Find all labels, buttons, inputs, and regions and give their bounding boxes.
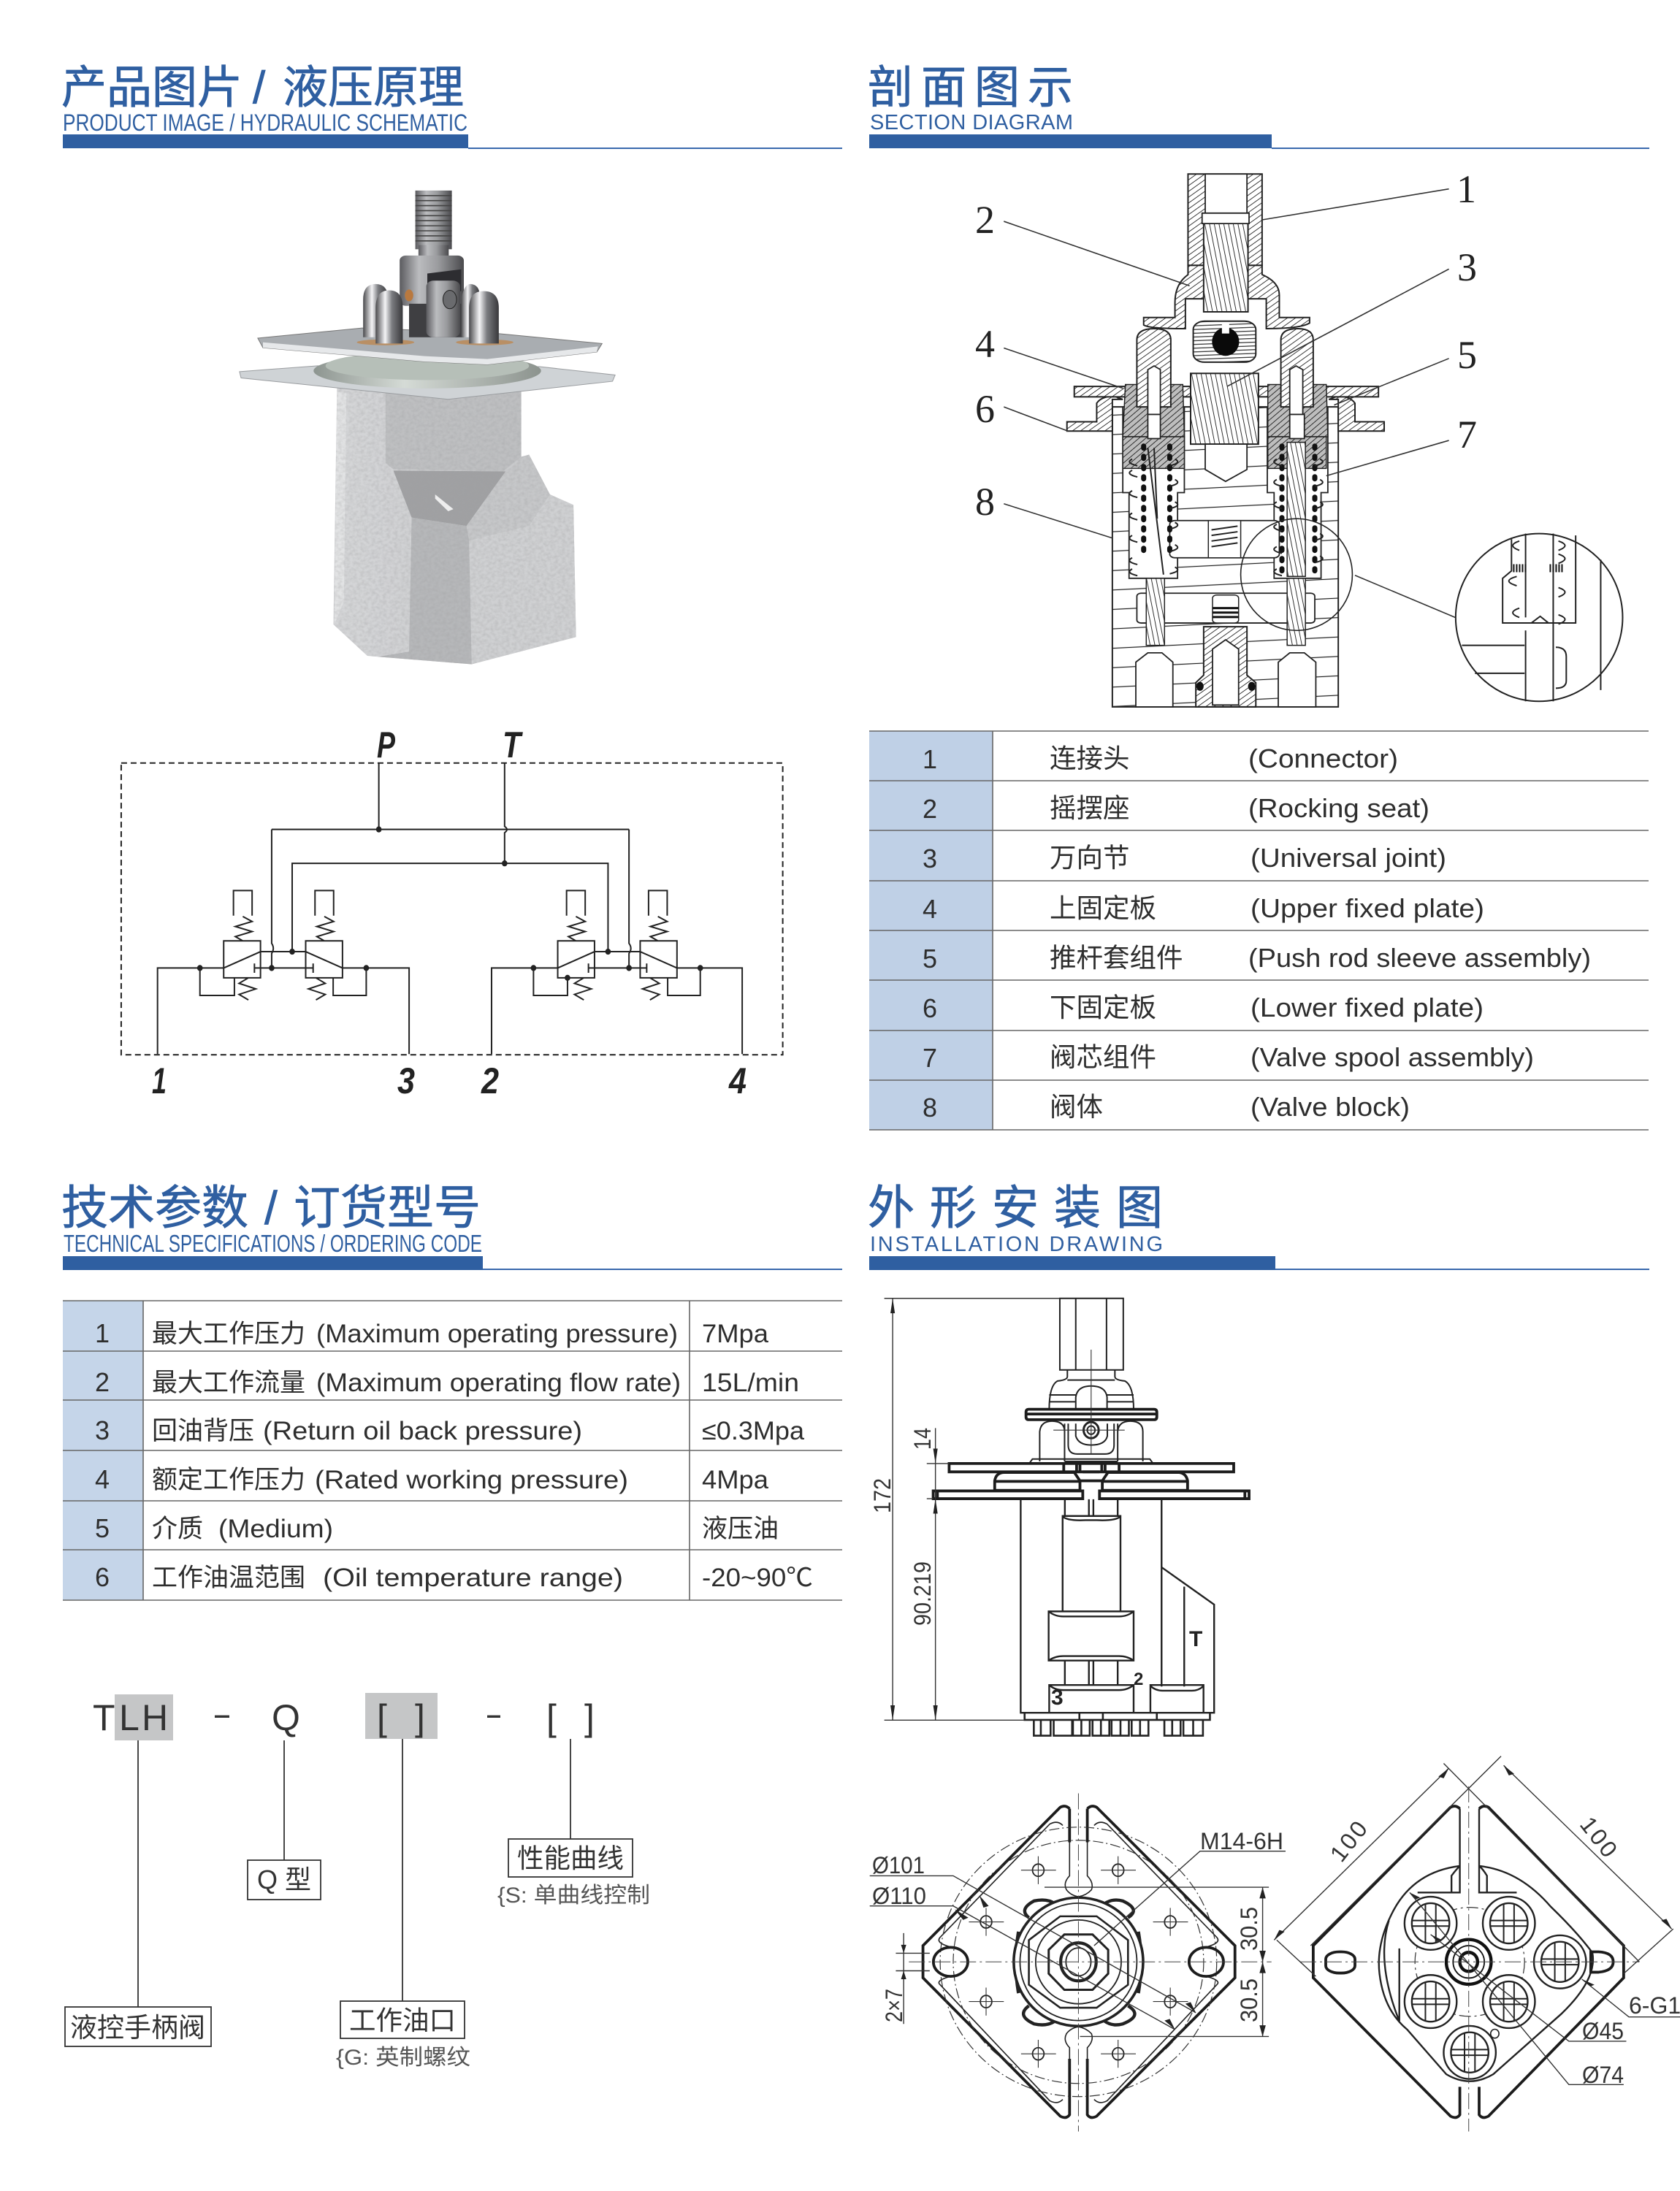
installation dimension labels: Ø110 bbox=[872, 1883, 926, 1909]
parts row 3: 万向节 bbox=[1050, 843, 1129, 873]
section drawing bbox=[1004, 174, 1622, 707]
bottom view: plate outline bbox=[1313, 1806, 1624, 2117]
section: part numbers: 1 bbox=[1456, 167, 1476, 211]
ordering: code letters: Q bbox=[272, 1697, 300, 1738]
parts row 6: 下固定板 bbox=[1050, 993, 1156, 1022]
spec row 3 bbox=[95, 1415, 805, 1445]
spec row 4: 4Mpa bbox=[702, 1466, 769, 1494]
section: leader lines bbox=[1004, 189, 1449, 538]
ordering: label work port bbox=[340, 2001, 465, 2038]
specifications table bbox=[63, 1301, 842, 1600]
photo: valve product bbox=[240, 191, 615, 665]
section: part numbers: 2 bbox=[975, 198, 995, 242]
parts row 5 bbox=[923, 943, 1591, 974]
installation dimension labels: 30.5 bbox=[1236, 1978, 1262, 2022]
top view: centerlines bbox=[909, 1793, 1272, 2132]
bottom view: small dowel bbox=[1491, 2029, 1499, 2038]
ordering: code letters: [ bbox=[546, 1697, 557, 1738]
parts row 8: (Valve block) bbox=[1251, 1092, 1410, 1122]
parts row 4: 上固定板 bbox=[1050, 893, 1156, 923]
heading: product image / hydraulic schematic: PRODUCT IMAGE / HYDRAULIC SCHEMATIC bbox=[63, 110, 467, 136]
ordering: label work port: 工作油口 bbox=[349, 2005, 456, 2035]
bottom view: body contour bbox=[1379, 1809, 1593, 2081]
parts table bbox=[869, 731, 1649, 1130]
section: universal joint bbox=[1194, 321, 1256, 362]
bottom view: port crosses bbox=[1412, 1904, 1578, 2072]
schematic: port labels: 2 bbox=[481, 1060, 499, 1101]
top view: bolt holes bbox=[969, 1857, 1188, 2068]
section: upper fixed plate bbox=[1074, 386, 1378, 397]
bottom view: slots bbox=[1326, 1951, 1614, 1973]
spec row 1 bbox=[95, 1318, 769, 1348]
side view: base and screws bbox=[1025, 1713, 1210, 1736]
spec row 1: (Maximum operating pressure) bbox=[316, 1320, 678, 1348]
spec row 4: 额定工作压力 bbox=[152, 1466, 305, 1494]
ordering: label performance curve: 性能曲线 bbox=[517, 1843, 624, 1873]
parts row 4: 4 bbox=[923, 894, 937, 924]
schematic: port labels: T bbox=[503, 724, 524, 765]
installation dimension labels: M14-6H bbox=[1200, 1828, 1283, 1854]
parts row 7: (Valve spool assembly) bbox=[1251, 1042, 1534, 1072]
side view: flange bbox=[1026, 1410, 1157, 1420]
heading: installation drawing: INSTALLATION DRAWING bbox=[870, 1233, 1163, 1256]
heading: technical specifications / ordering code: 技术参数/订货型号 bbox=[61, 1182, 481, 1234]
parts row 1 bbox=[923, 743, 1398, 774]
photo: threaded stud bbox=[416, 191, 452, 258]
parts row 2: (Rocking seat) bbox=[1248, 793, 1429, 823]
parts row 2: 摇摆座 bbox=[1050, 793, 1129, 823]
ordering: connector lines bbox=[138, 1739, 570, 2007]
top view: mounting slots bbox=[933, 1947, 1223, 1976]
section: part numbers: 8 bbox=[975, 480, 995, 524]
bottom view: ports bbox=[1405, 1897, 1586, 2079]
parts row 5: 5 bbox=[923, 944, 937, 974]
spec row 4: 4 bbox=[95, 1464, 110, 1494]
heading: installation drawing: 外形安装图 bbox=[868, 1182, 1163, 1234]
parts row 6: 6 bbox=[923, 993, 937, 1023]
heading: section diagram: 剖面图示 bbox=[868, 63, 1073, 113]
installation dimension labels: 100 bbox=[1575, 1812, 1622, 1862]
side view: hex connector bbox=[1049, 1299, 1134, 1410]
ordering: label hand valve: 液控手柄阀 bbox=[70, 2013, 205, 2043]
top view: mounting circles bbox=[940, 1827, 1217, 2097]
section: detail enlargement bbox=[1456, 534, 1622, 701]
ordering: code letters: – bbox=[215, 1693, 229, 1734]
parts row 1: (Connector) bbox=[1248, 743, 1398, 773]
bottom view: centerlines bbox=[1300, 1786, 1639, 2132]
parts row 6: (Lower fixed plate) bbox=[1251, 993, 1484, 1022]
installation dimension labels: Ø45 bbox=[1582, 2018, 1624, 2044]
side view: rods and joint bbox=[1030, 1421, 1153, 1463]
ordering: code letters: TLH bbox=[93, 1697, 168, 1738]
side view: dimension labels: 90.219 bbox=[909, 1561, 936, 1626]
spec row 1: 1 bbox=[95, 1318, 110, 1348]
schematic: port labels: 1 bbox=[152, 1060, 167, 1101]
parts row 3: (Universal joint) bbox=[1251, 843, 1446, 873]
schematic: dashed boundary bbox=[121, 763, 783, 1055]
ordering: code letters bbox=[93, 1693, 595, 1738]
side view: dimension labels: T bbox=[1189, 1627, 1202, 1651]
ordering code diagram bbox=[65, 1693, 650, 2070]
heading: product image / hydraulic schematic: 产品图片/液压原理 bbox=[61, 63, 464, 113]
photo: universal joint bbox=[400, 256, 464, 337]
parts row 8: 阀体 bbox=[1050, 1092, 1103, 1122]
parts row 5: (Push rod sleeve assembly) bbox=[1248, 943, 1591, 973]
section: part numbers: 5 bbox=[1457, 333, 1477, 377]
ordering: label Q type bbox=[248, 1860, 321, 1900]
schematic: junction dots bbox=[197, 827, 703, 981]
section: part numbers: 3 bbox=[1457, 245, 1477, 289]
side view: dimension labels: 3 bbox=[1051, 1686, 1064, 1710]
section: push rod sleeves bbox=[1123, 329, 1328, 468]
spec row 3: ≤0.3Mpa bbox=[702, 1417, 805, 1445]
section: magnifier circle bbox=[1241, 519, 1352, 630]
parts row 5: 推杆套组件 bbox=[1050, 943, 1183, 973]
ordering: label performance curve bbox=[508, 1839, 633, 1877]
spec row 5: 液压油 bbox=[702, 1515, 779, 1543]
heading: installation drawing bbox=[868, 1182, 1649, 1270]
top view: plate outline bbox=[923, 1806, 1235, 2117]
side view: dome and lower plate bbox=[933, 1472, 1249, 1499]
hydraulic schematic bbox=[121, 763, 783, 1055]
spec row 4 bbox=[95, 1464, 769, 1494]
spec row 2 bbox=[95, 1367, 799, 1397]
parts row 3: 3 bbox=[923, 844, 937, 873]
spec row 5: (Medium) bbox=[218, 1515, 333, 1543]
side view: dimension labels bbox=[869, 1428, 1202, 1710]
side view: dimension labels: 2 bbox=[1134, 1670, 1143, 1689]
spec row 6: 6 bbox=[95, 1562, 110, 1592]
ordering: code letters: – bbox=[487, 1693, 500, 1734]
bottom view: 100 dimension lines bbox=[1274, 1756, 1673, 1976]
ordering: label Q type: Q 型 bbox=[257, 1865, 311, 1894]
section: part numbers: 4 bbox=[975, 322, 995, 366]
spec row 6: 工作油温范围 bbox=[152, 1564, 305, 1592]
schematic: port labels: 3 bbox=[397, 1060, 415, 1101]
ordering: code letters: ] bbox=[415, 1697, 425, 1738]
heading: technical specifications / ordering code: TECHNICAL SPECIFICATIONS / ORDERING CODE bbox=[64, 1230, 482, 1257]
parts row 3 bbox=[923, 843, 1446, 873]
schematic: right valve pair bbox=[492, 890, 742, 1054]
parts row 6 bbox=[923, 993, 1484, 1023]
parts row 8: 8 bbox=[923, 1093, 937, 1123]
section: springs and rods bbox=[1129, 443, 1323, 576]
schematic: port labels: 4 bbox=[728, 1060, 747, 1101]
installation dimension labels: 100 bbox=[1325, 1816, 1372, 1867]
installation dimension labels bbox=[872, 1812, 1680, 2088]
spec row 2: 15L/min bbox=[702, 1369, 799, 1397]
section: rocking seat bbox=[1144, 265, 1310, 329]
photo: cast valve body bbox=[333, 386, 576, 665]
installation dimension labels: 2×7 bbox=[881, 1989, 907, 2022]
section: part numbers: 7 bbox=[1457, 413, 1477, 456]
schematic: pressure and tank lines bbox=[272, 763, 631, 968]
installation side view bbox=[885, 1299, 1249, 1736]
spec row 6: (Oil temperature range) bbox=[323, 1564, 623, 1592]
section: valve block bbox=[1112, 407, 1338, 707]
spec row 1: 7Mpa bbox=[702, 1320, 769, 1348]
spec row 3: 回油背压 bbox=[152, 1417, 254, 1445]
parts row 1: 连接头 bbox=[1050, 743, 1129, 773]
spec row 5: 介质 bbox=[152, 1515, 203, 1543]
section: center plug bbox=[1196, 521, 1256, 707]
parts row 7 bbox=[923, 1042, 1534, 1073]
spec row 3: (Return oil back pressure) bbox=[263, 1417, 582, 1445]
section: magnifier leader bbox=[1355, 576, 1455, 617]
side view: centerlines bbox=[1053, 1350, 1125, 1454]
section: connector bbox=[1188, 174, 1262, 312]
top view: arrows bbox=[901, 1887, 1266, 2036]
side view: valve body bbox=[1020, 1499, 1214, 1713]
spec row 2: (Maximum operating flow rate) bbox=[316, 1369, 681, 1397]
side view: dimension arrows bbox=[890, 1299, 938, 1720]
photo: lower plate and dome bbox=[240, 351, 615, 399]
spec row 6 bbox=[95, 1562, 813, 1592]
parts row 4: (Upper fixed plate) bbox=[1251, 893, 1484, 923]
parts row 7: 7 bbox=[923, 1043, 937, 1073]
side view: dimension labels: 14 bbox=[909, 1428, 936, 1450]
heading: product image / hydraulic schematic bbox=[61, 63, 842, 149]
photo: upper plate bbox=[258, 328, 602, 364]
schematic: port labels bbox=[152, 724, 747, 1101]
parts row 1: 1 bbox=[923, 744, 937, 774]
parts row 7: 阀芯组件 bbox=[1050, 1042, 1156, 1072]
bottom view: centre port bbox=[1446, 1940, 1491, 1984]
section: central shaft bbox=[1191, 373, 1259, 481]
parts row 2 bbox=[923, 793, 1429, 824]
ordering: note G thread: {G: 英制螺纹 bbox=[336, 2046, 470, 2070]
ordering: note S curve: {S: 单曲线控制 bbox=[497, 1884, 650, 1908]
parts row 4 bbox=[923, 893, 1484, 924]
spec row 5: 5 bbox=[95, 1513, 110, 1543]
top view: dimensions bbox=[896, 1887, 1269, 2036]
spec row 2: 2 bbox=[95, 1367, 110, 1397]
parts row 8 bbox=[923, 1092, 1410, 1123]
spec row 1: 最大工作压力 bbox=[152, 1320, 305, 1348]
side view: upper plate bbox=[949, 1464, 1234, 1472]
side view: dimension labels: 172 bbox=[869, 1478, 896, 1513]
schematic: left valve pair bbox=[158, 890, 409, 1054]
parts row 2: 2 bbox=[923, 794, 937, 824]
bottom view: leaders bbox=[1410, 1892, 1680, 2084]
ordering: code letters: [ bbox=[377, 1697, 387, 1738]
bottom view: port circle pitch bbox=[1415, 1908, 1524, 2016]
section: part numbers bbox=[975, 167, 1477, 524]
spec row 4: (Rated working pressure) bbox=[315, 1466, 628, 1494]
section: part numbers: 6 bbox=[975, 387, 995, 431]
ordering: grey highlights bbox=[115, 1693, 438, 1740]
spec row 5 bbox=[95, 1513, 779, 1543]
bottom drawings: top view bbox=[870, 1793, 1286, 2132]
top view: inner plate contour bbox=[939, 1822, 1218, 2103]
heading: section diagram bbox=[868, 63, 1649, 149]
installation dimension labels: Ø101 bbox=[872, 1852, 925, 1878]
bottom drawings: bottom view bbox=[1274, 1756, 1680, 2132]
installation dimension labels: Ø74 bbox=[1582, 2062, 1624, 2088]
section: lower fixed plate bbox=[1067, 397, 1384, 431]
spec row 3: 3 bbox=[95, 1415, 110, 1445]
ordering: code letters: ] bbox=[584, 1697, 595, 1738]
installation dimension labels: 30.5 bbox=[1236, 1907, 1262, 1951]
bottom view: arrows bbox=[1274, 1765, 1672, 1987]
heading: technical specifications / ordering code bbox=[61, 1182, 842, 1270]
side view: inner bores bbox=[1049, 1499, 1204, 1713]
top view: leaders bbox=[870, 1851, 1286, 2030]
heading: section diagram: SECTION DIAGRAM bbox=[870, 111, 1073, 134]
photo: push rods bbox=[363, 284, 499, 343]
side view: dimension lines bbox=[885, 1299, 1060, 1720]
top view: central assembly bbox=[1014, 1897, 1143, 2026]
schematic: port labels: P bbox=[377, 724, 395, 765]
spec row 2: 最大工作流量 bbox=[152, 1369, 305, 1397]
spec row 6: -20~90℃ bbox=[702, 1564, 813, 1592]
